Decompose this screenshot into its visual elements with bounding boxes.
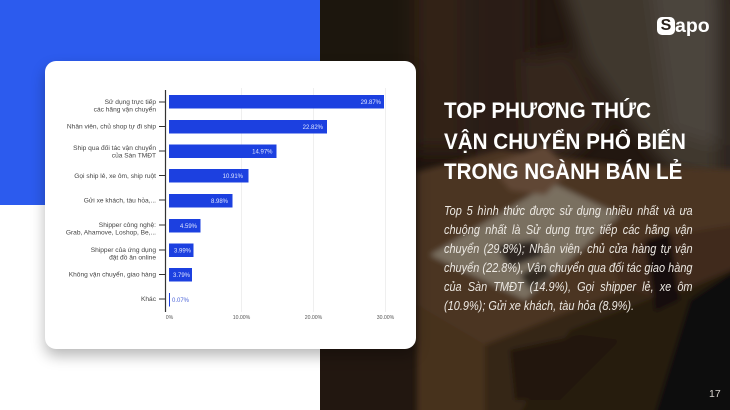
photo background: hands labelling a parcel — [320, 0, 730, 410]
text block: description: chuộng nhất là Sử dụng trực tiếp các hãng vận — [444, 223, 692, 237]
category labels: Shipper công nghệ: — [99, 222, 156, 229]
category labels: Ship qua đối tác vận chuyển — [73, 143, 156, 152]
page number: 17 — [709, 388, 721, 400]
title: VẬN CHUYỂN PHỔ BIẾN — [444, 129, 685, 154]
category labels: của Sàn TMĐT — [112, 152, 156, 160]
value labels: 3.99% — [174, 248, 192, 254]
value labels: 0.07% — [172, 298, 190, 304]
category labels: Grab, Ahamove, Loshop, Be,... — [66, 230, 156, 236]
panel: blue background block — [0, 0, 320, 205]
text block: description: chuyển (29.8%); Nhân viên, chủ cửa hàng tự vận — [444, 242, 692, 256]
category labels: Khác — [141, 296, 157, 303]
value labels: 3.79% — [173, 273, 191, 279]
category labels: Không vận chuyển, giao hàng — [69, 270, 156, 278]
panel: white chart card — [45, 61, 416, 349]
bar chart: shipping methods share — [66, 88, 395, 321]
value labels: 29.87% — [361, 100, 382, 106]
logo: Sapo: apo — [675, 15, 710, 37]
value labels: 22.82% — [303, 125, 324, 131]
title: TRONG NGÀNH BÁN LẺ — [444, 159, 682, 184]
text block: description: của Sàn TMĐT (14.9%), Gọi shipper lẻ, xe ôm — [444, 280, 692, 294]
x axis labels — [166, 315, 395, 321]
text block: description: chuyển (22.8%), Vận chuyển qua đối tác giao hàng — [444, 261, 692, 275]
category labels: Nhân viên, chủ shop tự đi ship — [67, 122, 156, 130]
value labels — [172, 100, 382, 304]
value labels: 4.59% — [180, 224, 198, 230]
logo: Sapo — [657, 15, 710, 37]
text block: description: (10.9%); Gửi xe khách, tàu hỏa (8.9%). — [444, 299, 634, 313]
bars — [169, 95, 384, 306]
x axis labels: 30.00% — [377, 315, 395, 321]
box faces — [417, 150, 730, 345]
category labels: Sử dụng trực tiếp — [105, 97, 156, 106]
y axis — [159, 90, 166, 312]
category labels: Gọi ship lẻ, xe ôm, ship ruột — [74, 173, 156, 180]
text block: description — [444, 204, 692, 313]
title: TOP PHƯƠNG THỨC — [444, 98, 650, 123]
category labels: đặt đồ ăn online — [109, 252, 156, 262]
hands — [490, 145, 570, 195]
category labels — [66, 97, 157, 303]
shipping label — [430, 183, 620, 300]
value labels: 10.91% — [223, 174, 244, 180]
category labels: các hãng vận chuyển — [94, 106, 156, 114]
x axis labels: 20.00% — [305, 315, 323, 321]
title — [444, 98, 685, 184]
category labels: Gửi xe khách, tàu hỏa,... — [84, 196, 156, 204]
text block: description: Top 5 hình thức được sử dụng nhiều nhất và ưa — [444, 204, 692, 218]
x axis labels: 0% — [166, 315, 174, 321]
x axis labels: 10.00% — [233, 315, 251, 321]
logo: Sapo: S — [661, 17, 671, 34]
category labels: Shipper của ứng dụng — [91, 246, 156, 254]
value labels: 14.97% — [252, 150, 273, 156]
value labels: 8.98% — [211, 199, 229, 205]
